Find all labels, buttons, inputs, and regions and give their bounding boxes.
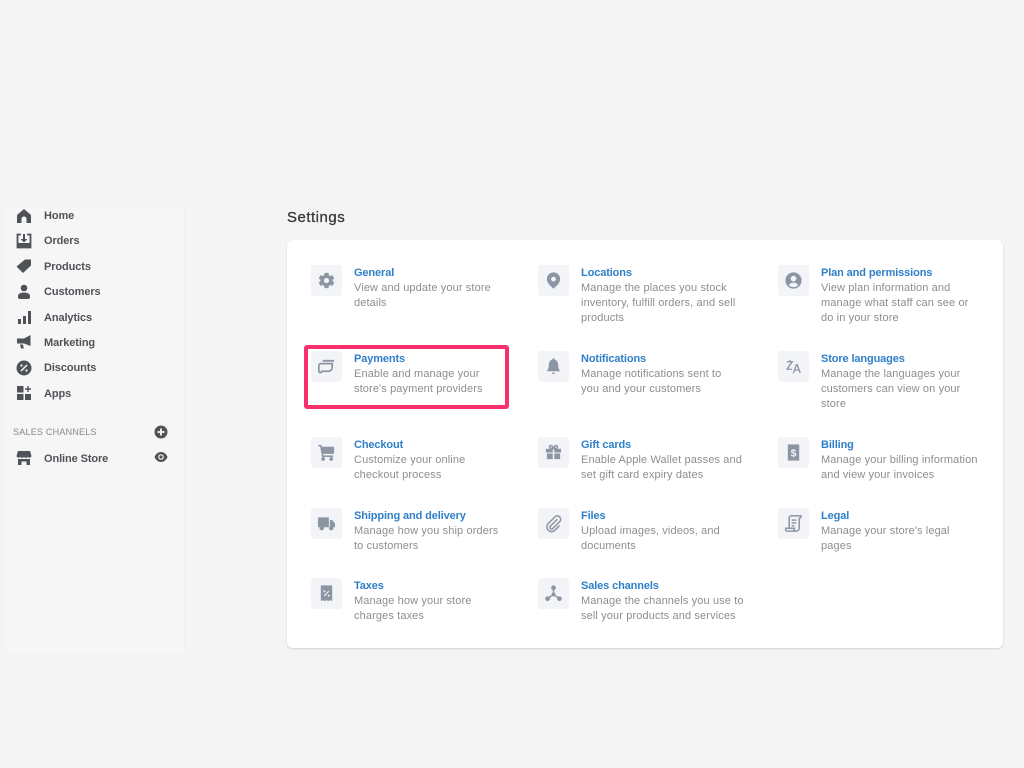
setting: Notifications — [538, 351, 721, 395]
setting: Checkout: Customize your online — [354, 454, 465, 466]
nav label: Orders: Orders — [44, 235, 79, 247]
icon: discounts — [16, 360, 32, 376]
sidebar navigation — [6, 207, 185, 653]
setting: General — [311, 265, 491, 309]
setting: Billing: and view your invoices — [821, 469, 934, 481]
setting: Gift cards: Gift cards — [581, 439, 631, 451]
nav label: Home: Home — [44, 210, 74, 222]
nav label: Products: Products — [44, 261, 91, 273]
setting: Shipping and delivery — [311, 508, 498, 552]
setting: Notifications: Manage notifications sent to — [581, 368, 721, 380]
setting: Shipping and delivery: to customers — [354, 540, 418, 552]
icon: products — [16, 260, 31, 273]
setting: Checkout — [311, 437, 465, 481]
setting: Sales channels — [538, 578, 744, 622]
nav label: Online Store: Online Store — [44, 453, 108, 465]
setting: Locations — [538, 265, 735, 324]
setting: Checkout: checkout process — [354, 469, 442, 481]
setting: Billing — [778, 437, 978, 481]
setting: Legal: pages — [821, 540, 852, 552]
icon: online store — [16, 451, 32, 465]
setting: Store languages — [778, 351, 960, 410]
setting: Locations: Locations — [581, 267, 632, 279]
icon: orders — [16, 234, 32, 248]
setting: Files: documents — [581, 540, 636, 552]
icon: apps — [17, 386, 31, 400]
setting: Gift cards — [538, 437, 742, 481]
icon: customers — [18, 284, 30, 299]
nav label: Customers: Customers — [44, 286, 101, 298]
setting: Payments: Payments — [354, 353, 405, 365]
setting: Sales channels: sell your products and services — [581, 610, 736, 622]
setting: Store languages: store — [821, 398, 846, 410]
setting: Payments — [311, 351, 483, 395]
callout: highlight around Payments — [304, 344, 508, 408]
setting: General: details — [354, 297, 387, 309]
setting: Legal — [778, 508, 950, 552]
setting: Payments: Enable and manage your — [354, 368, 480, 380]
setting: Legal: Manage your store's legal — [821, 524, 950, 536]
icon: view store — [154, 452, 168, 462]
page title: Settings: Settings — [287, 209, 345, 226]
setting: Legal: Legal — [821, 510, 849, 522]
setting: Plan and permissions: View plan information and — [821, 282, 950, 294]
setting: Store languages: customers can view on your — [821, 383, 960, 395]
setting: Store languages: Manage the languages your — [821, 368, 960, 380]
icon: home — [17, 209, 31, 223]
setting: General: General — [354, 267, 394, 279]
setting: Gift cards: set gift card expiry dates — [581, 469, 703, 481]
setting: Billing: Manage your billing information — [821, 454, 978, 466]
setting: Plan and permissions — [778, 265, 968, 324]
setting: Notifications: Notifications — [581, 353, 646, 365]
nav label: Discounts: Discounts — [44, 362, 96, 374]
setting: Plan and permissions: manage what staff can see or — [821, 297, 968, 309]
setting: Files: Files — [581, 510, 605, 522]
panel: settings card — [287, 240, 1003, 648]
setting: Billing: $ — [791, 448, 797, 459]
setting: Gift cards: Enable Apple Wallet passes and — [581, 454, 742, 466]
sales channels heading: SALES CHANNELS — [13, 427, 97, 437]
setting: Notifications: you and your customers — [581, 383, 701, 395]
nav label: Analytics: Analytics — [44, 312, 92, 324]
icon: marketing — [17, 335, 30, 348]
setting: Files — [538, 508, 720, 552]
setting: Locations: Manage the places you stock — [581, 282, 727, 294]
setting: Plan and permissions: do in your store — [821, 312, 899, 324]
setting: Payments: store's payment providers — [354, 383, 483, 395]
setting: Taxes: Manage how your store — [354, 594, 471, 606]
setting: Sales channels: Manage the channels you use to — [581, 594, 744, 606]
setting: General: View and update your store — [354, 282, 491, 294]
setting: Locations: products — [581, 312, 624, 324]
setting: Taxes: Taxes — [354, 580, 384, 592]
setting: Checkout: Checkout — [354, 439, 403, 451]
setting: Files: Upload images, videos, and — [581, 524, 720, 536]
setting: Billing: Billing — [821, 439, 854, 451]
setting: Shipping and delivery: Manage how you ship orders — [354, 524, 498, 536]
setting: Taxes: charges taxes — [354, 610, 424, 622]
setting: Taxes — [311, 578, 471, 622]
setting: Plan and permissions: Plan and permissions — [821, 267, 932, 279]
nav label: Marketing: Marketing — [44, 337, 95, 349]
nav label: Apps: Apps — [44, 388, 71, 400]
setting: Store languages: Store languages — [821, 353, 905, 365]
setting: Locations: inventory, fulfill orders, and sell — [581, 297, 735, 309]
setting: Shipping and delivery: Shipping and delivery — [354, 510, 466, 522]
icon: analytics — [18, 311, 31, 324]
icon: add channel — [154, 426, 168, 438]
setting: Sales channels: Sales channels — [581, 580, 659, 592]
